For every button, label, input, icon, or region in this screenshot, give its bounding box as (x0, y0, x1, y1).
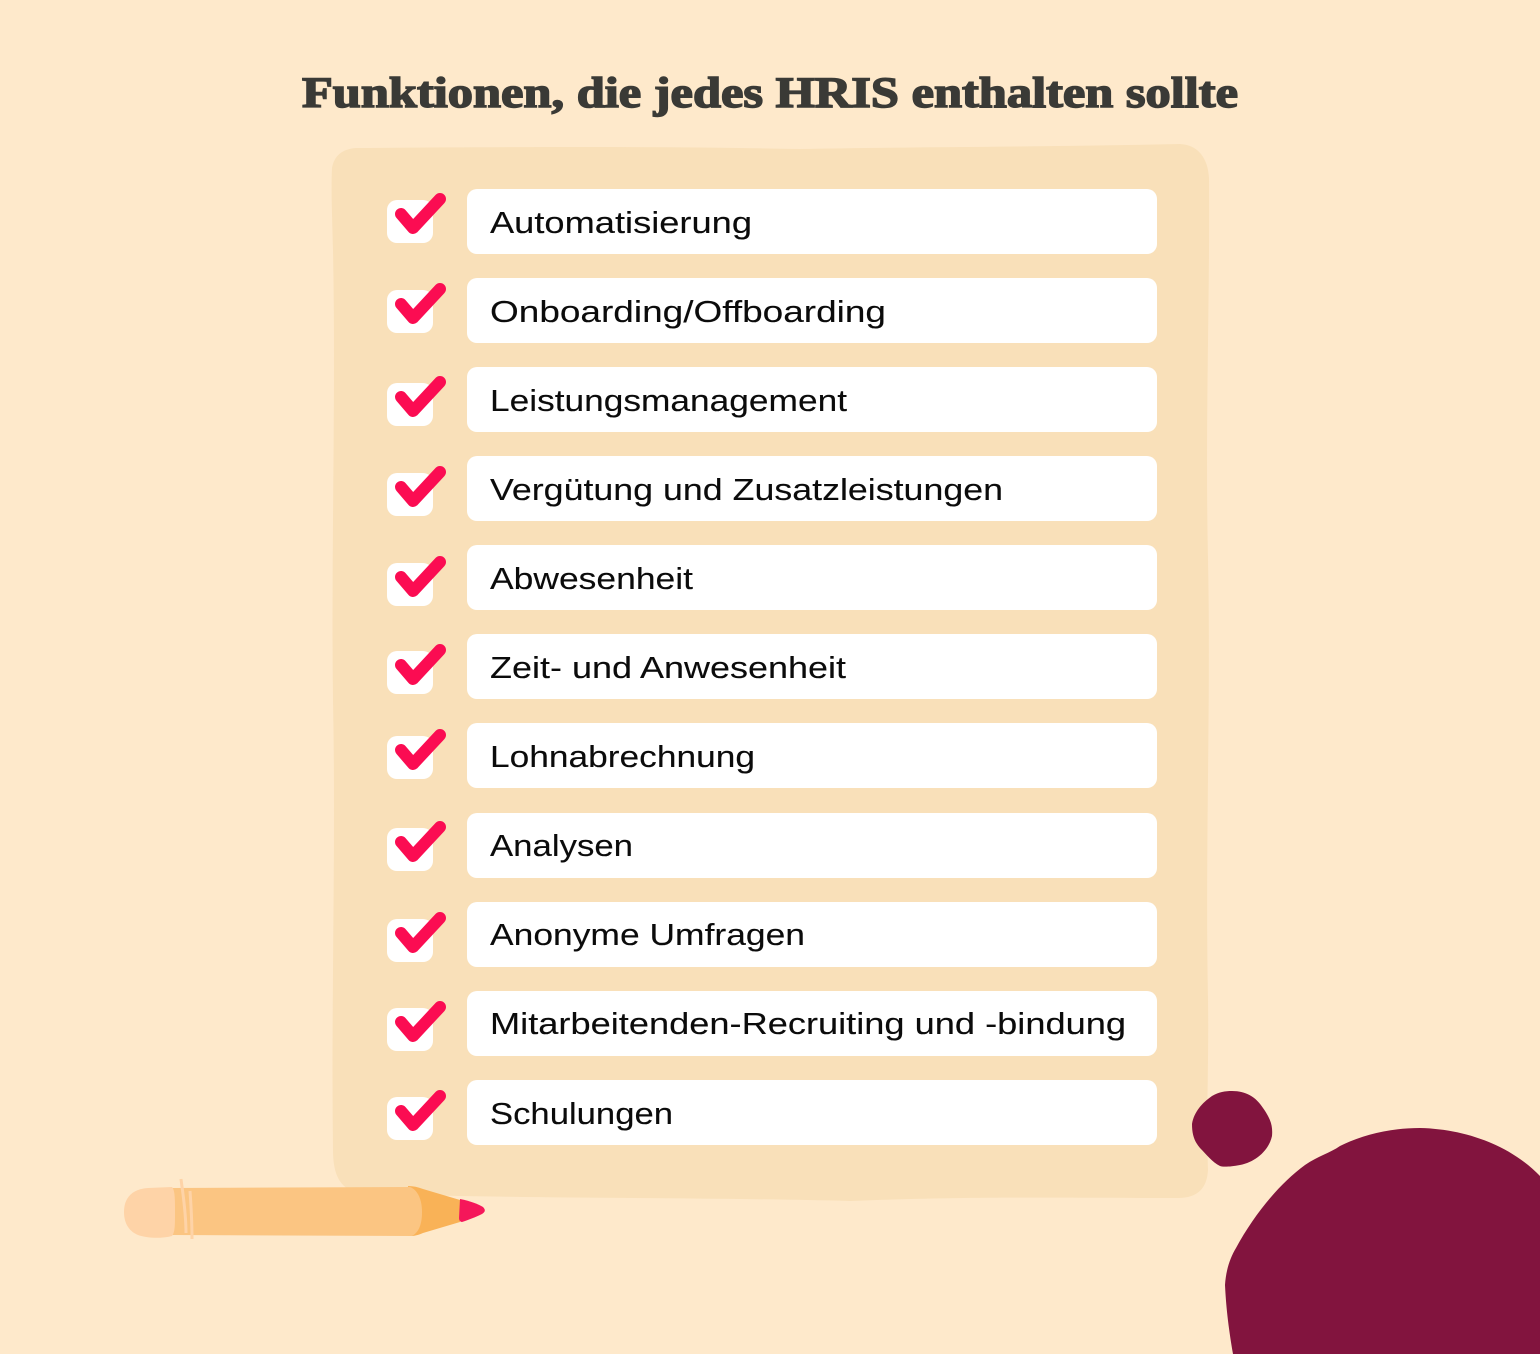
list row: Mitarbeitenden-Recruiting und -bindung: Mitarbeitenden-Recruiting und -bindung (490, 1006, 1126, 1041)
list row: Vergütung und Zusatzleistungen (387, 456, 1157, 521)
list row: Onboarding/Offboarding: Onboarding/Offboarding (490, 294, 886, 329)
list row: Onboarding/Offboarding (387, 278, 1157, 343)
list row: Abwesenheit: Abwesenheit (490, 561, 693, 596)
list row: Zeit- und Anwesenheit (387, 634, 1157, 699)
decorative dot (1192, 1091, 1272, 1167)
list row: Abwesenheit (387, 545, 1157, 610)
list row: Analysen: Analysen (490, 828, 633, 863)
icon: pencil (124, 1179, 485, 1239)
list row: Anonyme Umfragen: Anonyme Umfragen (490, 917, 805, 952)
list row: Mitarbeitenden-Recruiting und -bindung (387, 991, 1157, 1056)
list row: Lohnabrechnung (387, 723, 1157, 788)
list row: Lohnabrechnung: Lohnabrechnung (490, 739, 755, 774)
decorative blob (1225, 1128, 1540, 1354)
list row: Schulungen: Schulungen (490, 1096, 673, 1131)
panel: checklist sheet (332, 144, 1209, 1201)
list row: Leistungsmanagement: Leistungsmanagement (490, 383, 847, 418)
list row: Automatisierung (387, 189, 1157, 254)
list row: Anonyme Umfragen (387, 902, 1157, 967)
list row: Leistungsmanagement (387, 367, 1157, 432)
title: Funktionen, die jedes HRIS enthalten sollte (302, 70, 1238, 117)
list row: Automatisierung: Automatisierung (490, 205, 752, 240)
list row: Vergütung und Zusatzleistungen: Vergütung und Zusatzleistungen (490, 472, 1003, 507)
list row: Analysen (387, 813, 1157, 878)
list row: Zeit- und Anwesenheit: Zeit- und Anwesenheit (490, 650, 846, 685)
list row: Schulungen (387, 1080, 1157, 1145)
